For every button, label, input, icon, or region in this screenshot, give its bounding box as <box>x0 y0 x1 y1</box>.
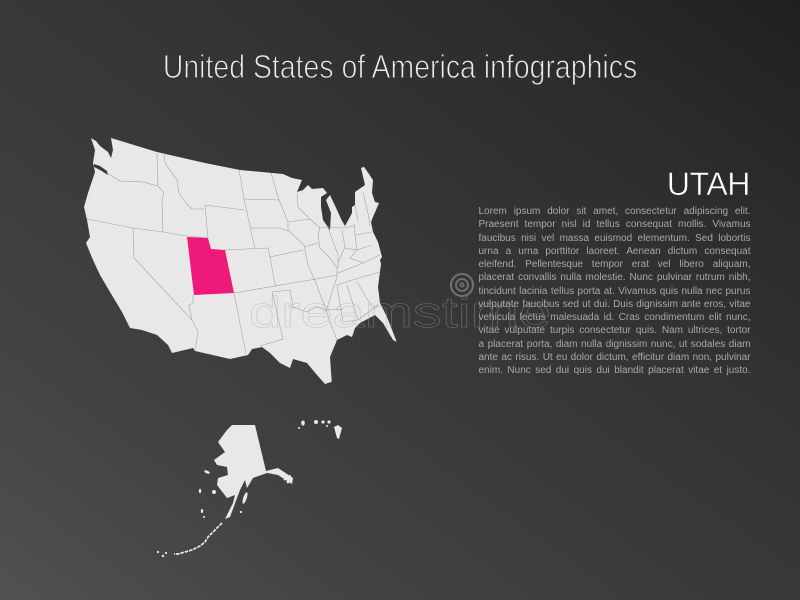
watermark: dreamstime <box>249 288 551 337</box>
description text: eleifend. Pellentesque tempor erat vel libero aliquam, <box>478 259 750 270</box>
description text: vulputate faucibus sed ut dui. Duis dignissim ante eros, vitae <box>478 299 750 310</box>
description text: faucibus nisi vel massa euismod elementum. Sed lobortis <box>478 232 750 244</box>
description text: enim. Nunc sed dui quis dui blandit placerat vitae et justo. <box>478 365 750 376</box>
description text: a placerat porta, diam nulla dignissim nunc, ut sodales diam <box>478 338 750 350</box>
Utah highlighted <box>187 237 234 295</box>
description text <box>478 206 750 376</box>
description text: vehicula lectus malesuada id. Cras condimentum elit nunc, <box>478 312 750 323</box>
title: United States of America infographics <box>163 48 637 85</box>
description text: vitae vulputate turpis consectetur quis. Nam ultrices, tortor <box>478 325 750 336</box>
description text: placerat convallis nulla molestie. Nunc pulvinar rutrum nibh, <box>478 272 750 283</box>
description text: urna a urna porttitor laoreet. Aenean dictum consequat <box>478 246 750 257</box>
Alaska <box>157 425 293 557</box>
description text: tincidunt lacinia tellus porta at. Vivamus quis nulla nec purus <box>478 286 750 296</box>
Hawaii <box>298 420 342 439</box>
description text: Praesent tempor nisl id tellus consequat mollis. Vivamus <box>478 219 750 230</box>
state name: UTAH <box>667 166 750 202</box>
watermark <box>249 274 551 337</box>
description text: Lorem ipsum dolor sit amet, consectetur adipiscing elit. <box>478 206 750 217</box>
description text: ante ac risus. Ut eu dolor dictum, efficitur diam non, pulvinar <box>478 352 750 363</box>
contiguous states <box>84 138 397 384</box>
